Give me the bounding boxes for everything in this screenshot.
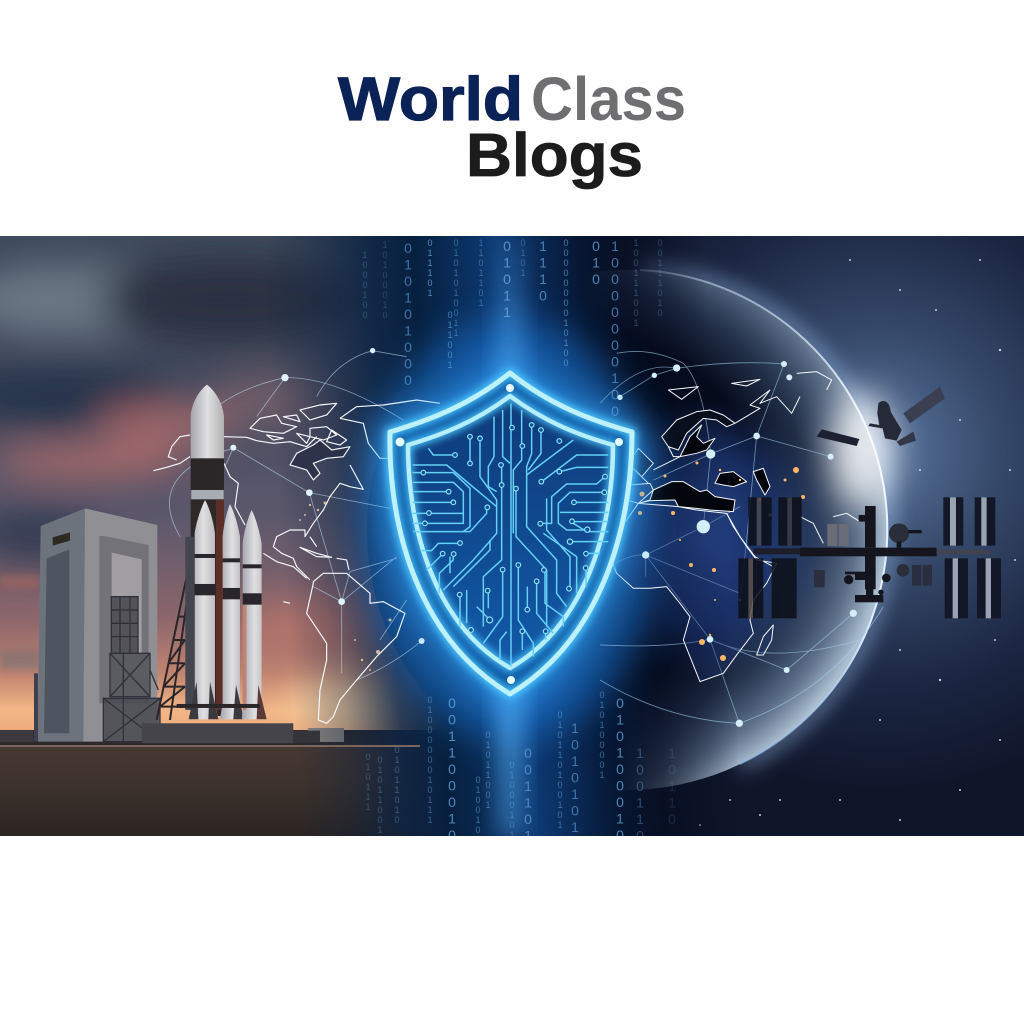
logo word: Class: Class <box>531 65 686 133</box>
baltic sea <box>680 425 715 457</box>
truss <box>800 548 937 556</box>
rocket launch site <box>0 385 320 743</box>
binary code columns: 1101101 <box>476 238 486 308</box>
binary code columns: 10000000100 <box>607 238 623 420</box>
hero image panel <box>0 236 1024 860</box>
iceland <box>668 387 698 399</box>
shield inner line <box>408 396 613 668</box>
logo word: World: World <box>338 65 523 133</box>
shield outer line <box>390 373 632 694</box>
binary code columns: 0101 <box>518 238 528 278</box>
shield glow <box>390 373 632 694</box>
world map left: the Americas <box>153 400 440 723</box>
canadian coast and islands <box>224 403 347 447</box>
central data column <box>284 236 734 836</box>
binary code columns: 100111001 <box>631 238 641 328</box>
shield halo in column <box>360 320 660 740</box>
binary code columns: 001101 <box>520 745 536 844</box>
greenland coast <box>340 400 440 458</box>
binary code columns: 010101000 <box>400 240 416 388</box>
launch platform <box>142 723 293 743</box>
binary code columns: 010100001 <box>597 690 607 780</box>
binary code columns: 011001 <box>445 310 455 370</box>
shield outer line glow <box>390 373 632 694</box>
binary code columns: 10110 <box>664 745 680 828</box>
binary code columns: 0101000100 <box>612 695 628 860</box>
russia arctic coast <box>735 372 832 423</box>
binary code columns: 00111010 <box>655 238 665 318</box>
binary code columns: 1110 <box>535 238 551 304</box>
madagascar <box>757 625 773 655</box>
building shell <box>37 508 85 742</box>
novaya zemlya <box>732 379 760 386</box>
europe coast <box>642 447 680 483</box>
south america <box>307 573 405 723</box>
planet rim <box>640 270 887 764</box>
binary code columns: 0101010011 <box>451 238 461 338</box>
booster one <box>189 500 218 719</box>
network arcs right <box>600 351 883 723</box>
space background <box>585 236 1024 836</box>
cybersecurity shield <box>390 373 632 694</box>
scaffold tower <box>103 597 160 742</box>
binary code columns: 010111 <box>363 752 373 812</box>
network arcs left <box>169 351 422 680</box>
satellite silhouette <box>817 387 945 446</box>
binary code columns: 0100000010111 <box>425 695 435 825</box>
binary code columns: 10100010 <box>380 240 390 320</box>
binary code columns: 1000100 <box>360 250 370 320</box>
blue lit land region <box>636 408 826 668</box>
left sky <box>0 236 424 730</box>
world map right: Europe, Africa and Asia <box>610 372 860 682</box>
binary code columns: 0011000100 <box>444 695 460 860</box>
north america lights <box>299 502 392 671</box>
shield band <box>390 373 632 694</box>
iberia <box>627 483 653 503</box>
circuit traces <box>413 403 608 667</box>
gantry <box>157 577 187 720</box>
scandinavia <box>662 410 735 450</box>
shield corner nodes <box>396 384 623 684</box>
binary code columns: 0000000010100 <box>561 238 571 368</box>
binary code columns <box>360 238 680 860</box>
alaska <box>153 435 190 471</box>
africa <box>610 503 777 682</box>
mediterranean <box>638 482 735 512</box>
planet atmosphere glow <box>640 270 887 764</box>
small radiators <box>814 524 932 587</box>
binary code columns: 010 <box>588 238 604 288</box>
sunlit crescent <box>367 270 887 790</box>
binary code columns: 0100010100 <box>507 760 517 860</box>
city lights right <box>638 462 805 661</box>
binary code columns: 01011 <box>499 238 515 320</box>
black sea <box>715 472 747 487</box>
logo word: Blogs: Blogs <box>466 121 643 189</box>
binary code columns: 011101 <box>425 238 435 298</box>
satellite body <box>868 401 902 441</box>
central modules <box>844 506 922 602</box>
ground base line <box>0 745 420 747</box>
britain <box>633 448 654 477</box>
space station ISS <box>738 497 1001 618</box>
logo <box>338 65 686 189</box>
solar arrays right <box>943 497 1001 618</box>
binary code columns: 01011001 <box>375 755 385 835</box>
binary code columns: 010110100101 <box>555 710 565 830</box>
bright sun flare <box>832 392 892 508</box>
booster three <box>242 510 267 719</box>
binary code columns: 10101010 <box>567 720 583 852</box>
binary code columns: 01011010 <box>392 745 402 825</box>
binary code columns: 010010 <box>473 775 483 835</box>
booster two <box>220 504 244 719</box>
core rocket <box>185 385 224 716</box>
caspian sea <box>753 468 770 495</box>
satellite solar panels <box>903 387 945 423</box>
ground <box>0 746 442 836</box>
network nodes right <box>617 361 857 727</box>
planet earth <box>367 270 887 790</box>
distant hut <box>308 728 344 742</box>
circuit nodes <box>421 423 607 634</box>
horizon strip <box>0 730 436 745</box>
shield inner line glow <box>408 396 613 668</box>
caribbean <box>300 537 349 570</box>
binary code columns: 100110 <box>632 745 648 844</box>
detached panel <box>817 429 859 446</box>
network nodes left <box>230 348 425 644</box>
hudson bay <box>290 440 350 480</box>
stars <box>699 259 1016 826</box>
solar arrays left <box>738 497 802 618</box>
east coast and central america <box>273 465 363 580</box>
red sea and arabia <box>727 513 773 567</box>
central light beam <box>496 236 524 836</box>
shield inner fill <box>408 396 613 668</box>
binary code columns: 01011001 <box>483 730 493 810</box>
